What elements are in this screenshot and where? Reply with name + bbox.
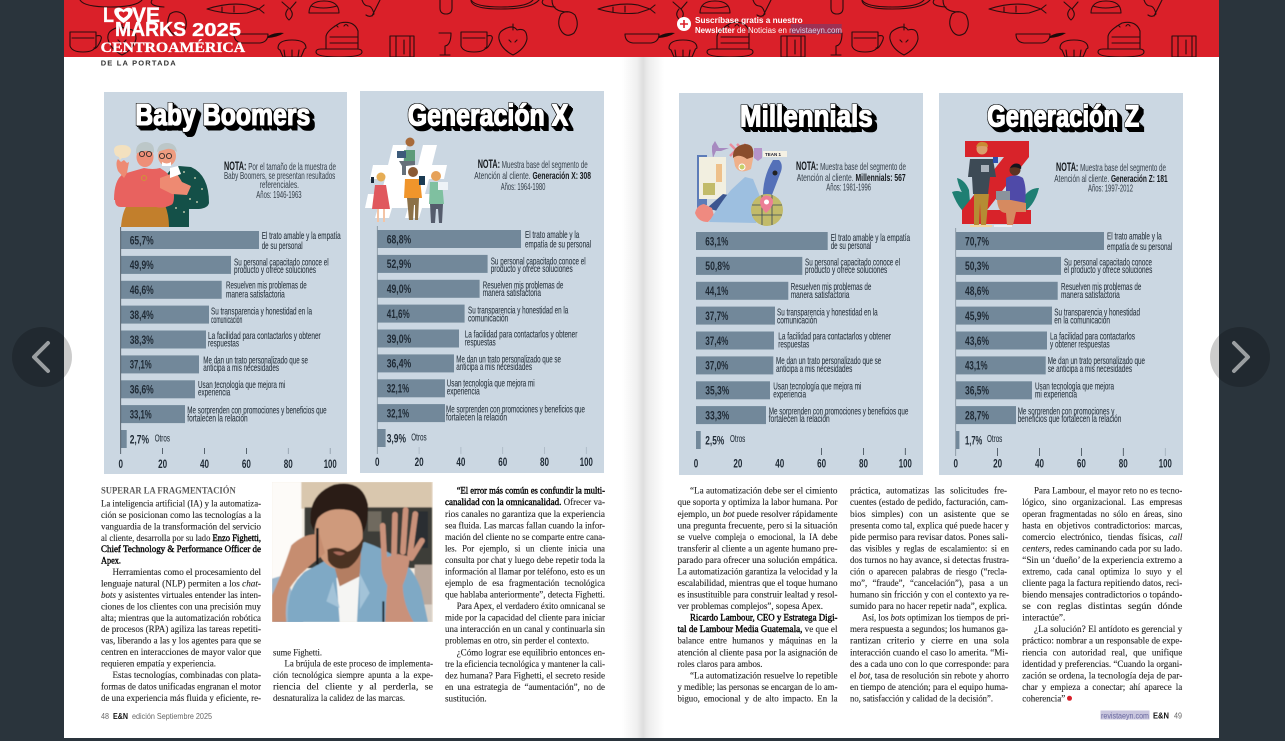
bar chart: Me dan un trato personalizado que se	[456, 354, 561, 365]
article text: column 4: Ricardo Lambour, CEO y Estratega Digi-	[690, 613, 838, 624]
bar chart: La facilidad para contactarlos y obtener	[465, 330, 578, 341]
footer: right page folio: 49	[1174, 710, 1182, 720]
bar chart: Me sorprenden con promociones y beneficios que	[446, 405, 585, 416]
bar chart: 20	[158, 457, 167, 471]
bar chart: 0	[953, 456, 958, 470]
article text: column 3: mide por la capacidad del cliente para iniciar	[445, 613, 606, 624]
panel: Baby Boomers	[104, 92, 347, 474]
article text: column 4: roles claros para ambos.	[678, 659, 762, 670]
bar chart: Su personal capacitado conoce el	[234, 257, 329, 268]
bar chart: Otros	[987, 434, 1002, 445]
note: referenciales.	[260, 180, 299, 191]
bar chart: experiencia	[447, 387, 480, 398]
article text: column 1: lenguaje natural (NLP) permiten a los chat-	[101, 578, 261, 590]
article text: column 4: transferir al cliente a un agente humano pre-	[678, 543, 838, 554]
bar chart: 100	[580, 455, 593, 469]
bar chart: 52,9%	[387, 257, 411, 271]
article text: column 6: extremo, cada canal optimiza lo suyo y el	[1022, 566, 1183, 578]
bar chart: respuestas	[465, 338, 496, 349]
bar chart: 37,0%	[705, 359, 728, 373]
bar chart: 20	[415, 455, 424, 469]
bar chart: 100	[324, 457, 337, 471]
bar chart	[118, 227, 341, 471]
note	[224, 159, 336, 201]
bar chart: manera satisfactoria	[1061, 290, 1120, 301]
article text: column 5: práctica, automatizas las solicitudes fre-	[850, 486, 1007, 497]
bar chart	[953, 228, 1172, 470]
article text: column 3: en una estrategia de “aumentación”, no de	[445, 682, 606, 693]
bar chart: manera satisfactoria	[791, 290, 850, 301]
bar chart: 50,8%	[705, 259, 730, 273]
article text: column 5: ción o aparecen palabras de riesgo (“recla-	[850, 566, 1007, 578]
bar chart: 60	[1077, 456, 1086, 470]
article text: column 3: información al llamar por teléfono, esto es un	[445, 566, 605, 578]
bar chart: Me sorprenden con promociones y	[1018, 406, 1115, 417]
article text: column 6: comercio electrónico, tiendas físicas, call	[1022, 532, 1183, 543]
bar chart: 36,6%	[130, 383, 154, 397]
bar chart: mi experiencia	[1035, 389, 1077, 400]
article text: column 1: bots y asistentes virtuales entender las inten-	[101, 590, 261, 601]
panel: Generación X	[360, 91, 604, 473]
bar chart: Resuelven mis problemas de	[483, 280, 564, 291]
article text: column 4: biguo, emocional y de alto impacto. En la	[678, 693, 838, 704]
article text: column 3: les. Por ejemplo, si un cliente inicia una	[445, 543, 606, 554]
logo: Love Marks 2025 Centroamérica: MARKS	[115, 19, 186, 41]
article text: column 1: La inteligencia artificial (IA) y la automatiza-	[101, 498, 261, 510]
article text: column 3: consulta por chat y luego debe repetir toda la	[445, 555, 606, 566]
article text: column 6: ¿La solución? El antídoto es gerencial y	[1034, 624, 1182, 635]
title: Millennials	[740, 98, 873, 134]
article text: column 5: cuentes (estado de pedido, facturación, cam-	[850, 497, 1008, 508]
bar chart: 65,7%	[130, 233, 154, 247]
note: NOTA: Por el tamaño de la muestra de	[224, 159, 336, 173]
article text: column 1	[101, 484, 262, 704]
bar chart: Otros	[730, 434, 745, 445]
bar chart: Su personal capacitado conoce	[1064, 257, 1152, 268]
icon: gamer with headset: TEAN 1	[765, 152, 782, 157]
article text: column 3: mación del cliente no se comparte entre cana-	[445, 532, 605, 543]
bar chart: Me dan un trato personalizado que se	[776, 356, 881, 367]
article text: column 4: “La automatización resuelve lo repetible	[690, 670, 838, 681]
bar chart: 46,6%	[130, 283, 154, 297]
article text: column 5: Así, los bots optimizan los tiempos de pri-	[862, 613, 1009, 624]
article text: column 6	[1022, 486, 1183, 704]
article text: column 3: sea fluida. Las marcas fallan cuando la infor-	[445, 520, 605, 531]
article text: column 4: escalabilidad, mientras que el toque humano	[678, 578, 838, 589]
bar chart: 32,1%	[387, 406, 409, 420]
article text: column 2: riencia del cliente y al perderla, se	[273, 681, 434, 692]
bar chart: Resuelven mis problemas de	[1061, 282, 1141, 293]
bar chart: 0	[375, 455, 380, 469]
note: Atención al cliente. Generación X: 308	[474, 171, 591, 182]
article text: column 1: ciones de los clientes con una precisión muy	[101, 601, 261, 612]
article text: column 3: dez humana? Para Fighetti, el secreto reside	[445, 670, 606, 681]
article text: column 3	[445, 486, 606, 704]
article text: column 1: Herramientas como el procesamiento del	[112, 567, 261, 578]
footer: left page folio	[101, 711, 212, 721]
article text: column 6: hasta en objetivos contradictorios: marcas,	[1022, 520, 1182, 531]
logo: Love Marks 2025 Centroamérica: VE	[132, 4, 160, 27]
bar chart: beneficios que fortalecen la relación	[1018, 414, 1122, 425]
newsletter subscribe call to action: Suscríbase gratis a nuestro	[695, 16, 803, 25]
bar chart: 0	[118, 457, 123, 471]
footer: left page folio: edición Septiembre 2025	[132, 711, 212, 721]
bar chart: 2,7%	[130, 432, 149, 446]
article text: column 1: Apex.	[101, 556, 121, 567]
article text: column 4: y medible; las personas se encargan de lo am-	[678, 682, 838, 693]
bar chart: Me dan un trato personalizado que	[1048, 356, 1145, 367]
panel: Generación Z	[939, 93, 1183, 475]
panel: Millennials	[679, 93, 923, 475]
bar chart: Resuelven mis problemas de	[791, 282, 872, 293]
bar chart: 80	[284, 457, 293, 471]
bar chart: 44,1%	[705, 284, 728, 298]
note: Años: 1981-1996	[826, 182, 871, 194]
bar chart: fortalecen la relación	[446, 412, 507, 423]
article text: column 5: el bot, tasa de resolución sin rebote y ahorro	[850, 670, 1009, 681]
bar chart: 40	[775, 456, 785, 470]
bar chart: 39,0%	[387, 332, 411, 346]
bar chart: 1,7%	[965, 433, 982, 447]
bar chart: 20	[733, 456, 743, 470]
bar chart: Usan tecnología que mejora mi	[198, 380, 285, 391]
article text: column 5: no, satisfacción y calidad de la decisión”.	[850, 693, 993, 704]
bar chart: producto y ofrece soluciones	[234, 265, 316, 276]
bar chart: Su transparencia y honestidad	[1054, 308, 1140, 319]
article text: column 6: Para Lambour, el mayor reto no es tecno-	[1034, 486, 1182, 497]
bar chart: empatía de su personal	[525, 239, 591, 250]
bar chart: Me dan un trato personalizado que se	[203, 355, 308, 366]
article text: column 4: una pregunta frecuente, pero si la situación	[678, 520, 838, 531]
logo: Love Marks 2025 Centroamérica	[101, 4, 246, 56]
bar chart: 40	[456, 455, 466, 469]
bar chart: anticipa a mis necesidades	[456, 362, 532, 373]
bar chart: Usan tecnología que mejora mi	[773, 381, 861, 392]
bar chart: 36,5%	[965, 384, 989, 398]
article text: column 1: de procesos (RPA) agiliza las tareas repetiti-	[101, 624, 261, 635]
section tag: de la portada: DE LA PORTADA	[101, 58, 176, 68]
article text: column 5: rantizan criterio y cierre en una sola	[850, 636, 1010, 647]
bar chart: experiencia	[198, 388, 230, 399]
bar chart: Usan tecnología que mejora	[1035, 381, 1114, 392]
article text: column 5: bios simples) con un asistente que se	[850, 509, 1010, 520]
bar chart: 60	[498, 455, 507, 469]
bar chart: 37,1%	[130, 358, 152, 372]
bar chart	[694, 232, 912, 470]
article text: column 6: coherencia”	[1022, 693, 1065, 704]
title: Baby Boomers	[135, 97, 310, 132]
bar chart: 28,7%	[965, 408, 989, 422]
note: NOTA: Muestra base del segmento de	[796, 159, 906, 173]
bar chart: Me sorprenden con promociones y beneficios que	[187, 406, 327, 417]
bar chart: 3,9%	[387, 431, 406, 445]
article text: column 4: que soporta y optimiza la labor humana. Por	[678, 497, 838, 508]
bar chart: manera satisfactoria	[226, 289, 285, 300]
article text: column 1: formas de datos unificadas engranan el motor	[101, 681, 262, 692]
note: Atención al cliente. Millennials: 567	[797, 173, 906, 184]
logo: Love Marks 2025 Centroamérica: L	[103, 4, 114, 27]
article text: column 6: cliente paga la factura repitiendo datos, reci-	[1022, 578, 1182, 589]
title: Generación Z	[987, 98, 1139, 134]
bar chart: 32,1%	[387, 382, 409, 396]
footer: right page folio: revistaeyn.com	[1101, 710, 1149, 720]
article text: column 6: biendo mensajes contradictorios o topándo-	[1022, 590, 1182, 601]
bar chart: 80	[1119, 456, 1128, 470]
article text: column 3: que hablaba anteriormente”, detecta Fighetti.	[445, 590, 605, 601]
note	[796, 159, 906, 194]
article text: column 4: ejemplo, un bot puede resolver rápidamente	[678, 509, 838, 520]
note: Años: 1946-1963	[256, 190, 302, 201]
bar chart: respuestas	[778, 340, 809, 351]
article text: column 3: ¿Cómo lograr ese equilibrio entonces en-	[457, 647, 605, 658]
bar chart: anticipa a mis necesidades	[203, 363, 279, 374]
article text: column 1: Chief Technology & Performance Officer de	[101, 544, 262, 555]
article text: column 2: La brújula de este proceso de implementa-	[284, 658, 433, 670]
bar chart: 33,1%	[130, 407, 152, 421]
article text: column 6: riencia con autoridad real, que unifique	[1022, 647, 1183, 658]
title: Generación X	[408, 98, 569, 132]
bar chart: El trato amable y la	[1107, 232, 1162, 243]
article text: column 5: des a cada uno con lo que corresponde: para	[850, 659, 1010, 670]
article text: column 4: se vuelve compleja o emocional, la IA debe	[678, 532, 838, 543]
bar chart: 49,0%	[387, 282, 411, 296]
newsletter subscribe call to action: Newsletter de Noticias en revistaeyn.com	[695, 26, 842, 35]
icon: people over hashtag	[365, 138, 448, 223]
photo: man on the phone	[272, 482, 433, 628]
note: Atención al cliente. Generación Z: 181	[1054, 174, 1168, 185]
bar chart: 49,9%	[130, 258, 154, 272]
bar chart: Resuelven mis problemas de	[226, 281, 307, 292]
bar chart: 60	[817, 456, 826, 470]
footer: left page folio: E&N	[113, 711, 128, 721]
article text: column 6: centers, redes caminando cada por su lado.	[1022, 543, 1182, 554]
bar chart: fortalecen la relación	[187, 413, 248, 424]
bar chart: 38,3%	[130, 333, 154, 347]
article text: column 1: vas, liberando a las y los agentes para que se	[101, 636, 262, 647]
newsletter subscribe call to action	[677, 16, 842, 35]
bar chart: 68,8%	[387, 232, 411, 246]
article text: column 6: zación se ordena, la tecnología deja de par-	[1022, 670, 1182, 681]
article text: column 6: interactúe”.	[1022, 613, 1065, 624]
bar chart: experiencia	[773, 389, 806, 400]
bar chart	[375, 226, 593, 469]
article text: column 2: desnaturaliza la calidez de las marcas.	[273, 693, 405, 704]
article text: column 2	[273, 647, 434, 704]
article text: column 3: ejemplo de esa fragmentación tecnológica	[445, 578, 606, 589]
footer: left page folio: 48	[101, 711, 109, 721]
bar chart: La facilidad para contactarlos	[1050, 332, 1135, 343]
bar chart: 70,7%	[965, 234, 989, 248]
bar chart: Su personal capacitado conoce el	[805, 257, 900, 268]
bar chart: comunicación	[211, 315, 242, 326]
article text: column 1: alta; mientras que la automatización robótica	[101, 613, 262, 624]
bar chart: empatía de su personal	[1107, 242, 1172, 253]
bar chart: 20	[993, 456, 1002, 470]
bar chart: 48,6%	[965, 284, 989, 298]
bar chart: producto y ofrece soluciones	[491, 264, 573, 275]
article text: column 1: requieren empatía y experiencia.	[101, 658, 216, 670]
bar chart: manera satisfactoria	[483, 288, 541, 299]
bar chart: 80	[540, 455, 549, 469]
article text: column 1: vanguardia de la transformación del servicio	[101, 521, 261, 532]
bar chart: Otros	[411, 433, 427, 444]
bar chart: respuestas	[208, 338, 239, 349]
article text: column 6: lógico, sino organizacional. Las empresas	[1022, 497, 1182, 508]
bar chart: 100	[1159, 456, 1172, 470]
article text: column 5: interacción cuando el caso lo amerita. “Mi-	[850, 647, 1008, 658]
article text: column 5: mo”, “fraude”, “cancelación”), pasa a un	[850, 578, 1008, 589]
bar chart: Su personal capacitado conoce el	[491, 256, 586, 267]
bar chart: 40	[200, 457, 209, 471]
article text: column 1: al cliente, desarrolla por su lado Enzo Fighetti,	[101, 533, 261, 544]
note: Años: 1964-1980	[501, 182, 546, 193]
article text: column 5: das visibles y reglas de escalamiento: si en	[850, 543, 1009, 554]
bar chart: Su transparencia y honestidad en la	[777, 308, 878, 319]
article text: column 4: tal de Lambour Media Guatemala, ve que el	[678, 624, 838, 635]
note	[474, 157, 591, 193]
icon: young people with red Z	[952, 141, 1039, 227]
bar chart: anticipa a mis necesidades	[776, 364, 852, 375]
bar chart: El trato amable y la	[525, 230, 579, 241]
bar chart: 60	[242, 457, 251, 471]
article text: column 6: “Sin un ‘dueño’ de la experiencia extremo a	[1022, 555, 1183, 566]
article text: column 5: dos turnos no hay avance, si detectas frustra-	[850, 555, 1009, 566]
article text: column 1: de una experiencia más fluida y eficiente, re-	[101, 693, 261, 704]
bar chart: El trato amable y la empatía	[262, 231, 341, 242]
bar chart: 2,5%	[705, 433, 724, 447]
bar chart: 33,3%	[705, 408, 729, 422]
bar chart: en la comunicación	[1054, 315, 1110, 326]
note: NOTA: Muestra base del segmento de	[1056, 160, 1166, 174]
bar chart: 35,3%	[705, 384, 729, 398]
bar chart: de su personal	[262, 241, 303, 252]
bar chart: producto y ofrece soluciones	[805, 265, 887, 276]
bar chart: 0	[694, 456, 698, 470]
bar chart: 37,4%	[705, 334, 728, 348]
article text: column 3: canalidad con la omnicanalidad. Ofrecer va-	[445, 497, 605, 508]
bar chart: La facilidad para contactarlos y obtener	[208, 331, 321, 342]
bar chart: Usan tecnología que mejora mi	[447, 379, 535, 390]
bar chart: 45,9%	[965, 309, 989, 323]
article text: column 4: atención al cliente pasa por la asignación de	[678, 647, 838, 658]
article text: column 5: sumido para no hacer repetir nada”, explica.	[850, 601, 1007, 612]
article text: column 6: char y empieza a conectar; ahí aparece la	[1022, 682, 1183, 693]
bar chart: 41,6%	[387, 307, 410, 321]
article text: column 6: se con reglas distintas según dónde	[1022, 601, 1183, 612]
bar chart: 63,1%	[705, 234, 728, 248]
article text: column 4: es insustituible para construir lealtad y resol-	[678, 590, 838, 601]
article text: column 3: problemas en otro, sin perder el contexto.	[445, 636, 589, 647]
icon: gamer with headset	[695, 141, 787, 226]
nav button: previous	[12, 327, 72, 387]
article text: column 5: presenta como tal, explica qué puede hacer y	[850, 520, 1009, 531]
bar chart: se anticipa a mis necesidades	[1048, 364, 1132, 375]
article text: column 3: tre la eficiencia tecnológica y mantener la cali-	[445, 659, 605, 670]
article text: column 5: humano sin fricción y con el contexto ya re-	[850, 590, 1009, 601]
footer: right page folio: E&N	[1153, 710, 1169, 720]
nav button: next	[1210, 327, 1270, 387]
article text: column 5: en tiempo de atención; para el equipo huma-	[850, 682, 1008, 693]
article text: column 4	[678, 486, 838, 704]
bar chart: Su transparencia y honestidad en la	[211, 307, 312, 318]
article text: column 3: rios canales no garantiza que la experiencia	[445, 509, 606, 520]
article text: column 3: sustitución.	[445, 693, 487, 704]
bar chart: y obtener respuestas	[1050, 340, 1110, 351]
bar chart: el producto y ofrece soluciones	[1064, 265, 1152, 276]
note	[1054, 160, 1168, 194]
bar chart: de su personal	[831, 241, 871, 252]
article text: column 5	[850, 486, 1010, 704]
note: Años: 1997-2012	[1088, 184, 1133, 194]
article text: column 5: pide permiso para revisar datos. Pones sali-	[850, 532, 1008, 543]
bar chart: 50,3%	[965, 259, 989, 273]
article text: column 2: ción tecnológica siempre apunta a la expe-	[273, 670, 433, 681]
bar chart: La facilidad para contactarlos y obtener	[778, 332, 891, 343]
note: NOTA: Muestra base del segmento de	[478, 157, 588, 171]
bar chart: 100	[899, 456, 912, 470]
note: Baby Boomers, se presentan resultados	[224, 171, 335, 182]
bar chart: 43,1%	[965, 359, 988, 373]
bar chart: comunicación	[777, 315, 817, 326]
article text: column 6: práctico: nombrar a un responsable de expe-	[1022, 636, 1182, 647]
header red band with food doodles	[64, 0, 1285, 57]
bar chart: 43,6%	[965, 334, 989, 348]
bar chart: Otros	[155, 434, 170, 445]
article text: column 1: ción se posicionan como las tecnologías a la	[101, 510, 262, 521]
article text: column 2: sume Fighetti.	[273, 647, 322, 658]
bar chart: El trato amable y la empatía	[831, 233, 910, 244]
article text: column 6: operan fragmentadas no sólo en áreas, sino	[1022, 509, 1182, 520]
article text: column 3: Para Apex, el verdadero éxito omnicanal se	[457, 601, 606, 612]
article text: column 3: “El error más común es confundir la multi-	[457, 486, 605, 497]
logo: Love Marks 2025 Centroamérica: CENTROAMÉRICA	[101, 39, 246, 56]
bar chart: comunicación	[468, 313, 508, 324]
article text: column 4: ver problemas complejos”, sopesa Apex.	[678, 601, 823, 612]
bar chart: Me sorprenden con promociones y beneficios que	[769, 406, 909, 417]
bar chart: Su transparencia y honestidad en la	[468, 306, 568, 317]
logo: Love Marks 2025 Centroamérica: 2025	[192, 20, 241, 40]
icon: elderly couple	[114, 142, 209, 227]
bar chart: fortalecen la relación	[769, 414, 830, 425]
footer: right page folio	[1100, 710, 1182, 720]
article text: column 3: una interacción en un canal y continuarla sin	[445, 624, 605, 635]
article text: column 1: centren en interacciones de mayor valor que	[101, 647, 262, 658]
article text: column 4: “La automatización debe ser el cimiento	[690, 486, 838, 497]
bar chart: 36,4%	[387, 357, 411, 371]
bar chart: 40	[1035, 456, 1044, 470]
bar chart: 80	[859, 456, 868, 470]
article text: column 1: SUPERAR LA FRAGMENTACIÓN	[101, 484, 236, 496]
article text: column 1: Estas tecnologías, combinadas con plata-	[112, 670, 261, 681]
article text: column 6: identidad y preferencias. “Cuando la organi-	[1022, 659, 1182, 670]
bar chart: 38,4%	[130, 308, 154, 322]
article text: column 4: parado para ofrecer una solución empática.	[678, 555, 838, 566]
article text: column 4: balance entre humanos y máquinas en la	[678, 636, 838, 647]
article text: column 4: La automatización garantiza la velocidad y la	[678, 566, 838, 578]
article text: column 5: mera respuesta a segundos; los humanos ga-	[850, 624, 1008, 635]
bar chart: 37,7%	[705, 309, 728, 323]
